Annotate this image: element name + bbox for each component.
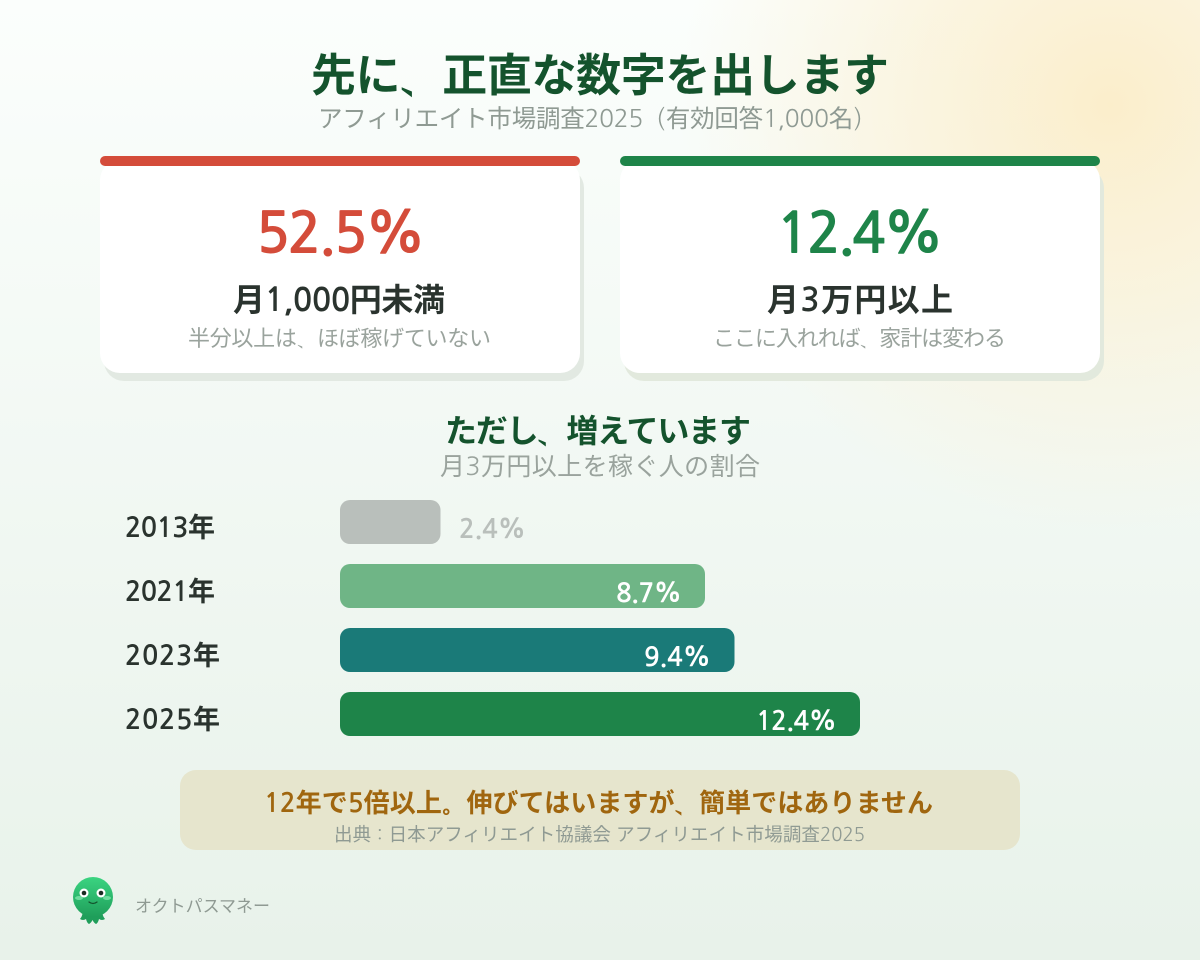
icon: octopus mascot [73, 877, 113, 924]
caption: 半分以上は、ほぼ稼げていない [188, 327, 491, 350]
bar: 2021 [125, 564, 705, 608]
bar: 2013 [125, 500, 526, 544]
subtitle: アフィリエイト市場調査2025（有効回答1,000名） [318, 105, 876, 131]
title: 先に、正直な数字を出します [311, 51, 889, 98]
bar: 2023: 9.4% [644, 644, 711, 670]
panel: 52.5% card [100, 156, 584, 381]
label: over 30,000 yen: 月3万円以上 [767, 283, 953, 316]
bar: 2021: 8.7% [616, 580, 682, 606]
stat: 12.4%: 12.4% [776, 207, 944, 262]
section heading: ただし、増えています [445, 414, 751, 447]
bar: 2013: 2.4% [459, 516, 526, 542]
bar: 2023 [125, 628, 734, 672]
stat: 52.5%: 52.5% [256, 207, 426, 262]
bar: 2021: 2021年 [125, 577, 215, 606]
bar: 2025: 2025年 [125, 705, 220, 734]
caption: ここに入れれば、家計は変わる [713, 327, 1006, 350]
label: under 1,000 yen: 月1,000円未満 [233, 283, 445, 316]
callout headline: 12年で5倍以上。伸びてはいますが、簡単ではありません [264, 788, 933, 816]
bar: 2013: 2013年 [125, 513, 215, 542]
section subheading: 月3万円以上を稼ぐ人の割合 [440, 453, 760, 479]
bar: 2025: 12.4% [756, 708, 837, 734]
panel: 12.4% card [620, 156, 1104, 381]
bar: 2023: 2023年 [125, 641, 220, 670]
source: 出典：日本アフィリエイト協議会 アフィリエイト市場調査2025 [334, 825, 865, 844]
bar: 2025 [125, 692, 860, 736]
brand name: オクトパスマネー [135, 897, 270, 915]
callout [180, 770, 1020, 850]
bar chart [125, 500, 860, 736]
